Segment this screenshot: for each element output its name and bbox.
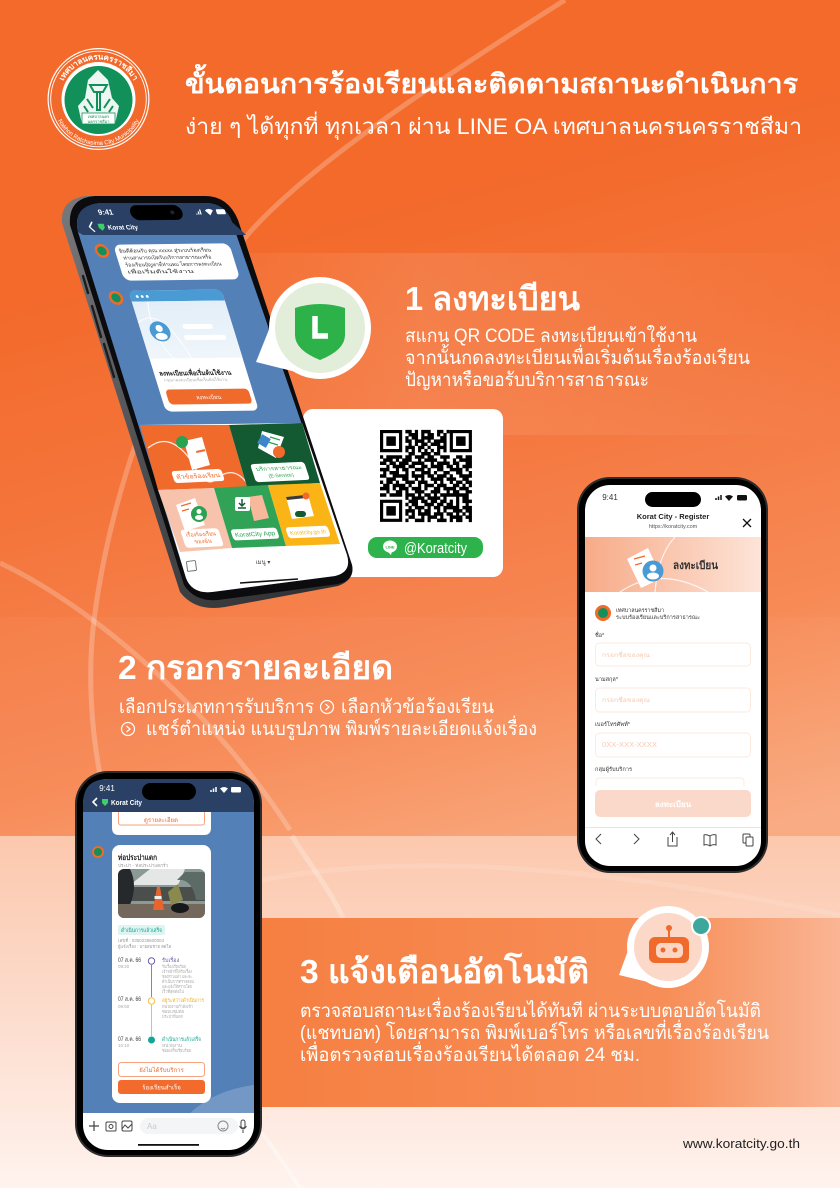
chat screen content: ท่านสามารถเปิดรับบริการสาธารณะหรือ — [122, 254, 212, 262]
menu tile: เรื่องร้องเรียนของฉัน: เรื่องร้องเรียน — [184, 529, 217, 539]
status timeline: 10:10 — [118, 1043, 130, 1048]
buttons — [118, 1062, 205, 1094]
form header — [585, 537, 761, 592]
photo: burst pipe — [118, 869, 205, 918]
status card: ดำเนินการแล้วเสร็จ — [121, 926, 162, 934]
status timeline: ของท่านแล้ว และจะ — [162, 974, 192, 979]
status card: ท่อประปาแตก — [118, 853, 157, 862]
chat screen content: ยินดีต้อนรับ คุณ xxxxx สู่ระบบร้องเรียน — [118, 247, 213, 255]
chat input bar — [89, 1118, 246, 1134]
menu tile: KoratCity App: KoratCity App — [234, 530, 277, 539]
website url: www.koratcity.go.th — [682, 1136, 800, 1151]
panel: QR code card — [303, 409, 503, 577]
step 2 heading: 2 กรอกรายละเอียด — [118, 649, 393, 686]
status timeline: และแจ้งให้ทราบโดย — [162, 983, 192, 989]
chat screen content: ร้องเรียนปัญหาที่ท่านพบ โดยการลงทะเบียน — [124, 261, 223, 269]
phone 2: registration form: Korat City - Register — [637, 512, 709, 521]
phone 3: LINE status screen: Aa — [147, 1122, 157, 1131]
chat screen content — [81, 204, 287, 412]
form body: กรอกชื่อของคุณ — [602, 651, 650, 659]
status timeline: หน่วยงาน — [162, 1043, 182, 1048]
menu tile: koratcity.go.th: Koratcity.go.th — [289, 529, 327, 537]
status timeline: หน่วยงานกำลังเข้า — [162, 1003, 193, 1009]
menu tile: e-Service — [229, 423, 320, 487]
form body: เทศบาลนครราชสีมา — [616, 607, 664, 614]
logo: Nakhon Ratchasima City Municipality seal: Nakhon Ratchasima City Municipality — [58, 118, 140, 145]
previous card — [112, 812, 211, 835]
step 1 heading: 1 ลงทะเบียน — [405, 280, 580, 317]
phone 1: LINE registration screen — [62, 196, 352, 608]
subtitle: ง่าย ๆ ได้ทุกที่ ทุกเวลา ผ่าน LINE OA เทศบาลนครนครราชสีมา — [185, 111, 802, 140]
status timeline — [118, 956, 204, 1053]
form body: ลงทะเบียน — [655, 799, 692, 809]
browser toolbar — [585, 828, 761, 846]
status timeline: เร็วที่สุดต่อไป — [162, 987, 184, 995]
status timeline: ประปาที่แตก — [162, 1013, 183, 1019]
logo: Nakhon Ratchasima City Municipality seal: เทศบาลนครนครราชสีมา — [59, 54, 137, 81]
status timeline: 09:20 — [118, 964, 130, 969]
LINE id pill: LINE — [385, 544, 395, 549]
form body: กรอกชื่อของคุณ — [602, 696, 650, 704]
icon: LINE shield callout — [256, 277, 371, 379]
menu tile: koratcity.go.th — [268, 483, 340, 546]
status timeline: เจ้าหน้าที่ได้รับเรื่อง — [162, 968, 192, 974]
status timeline: ซ่อมเสร็จเรียบร้อย — [162, 1046, 191, 1053]
status card: ผู้แจ้งเรื่อง : นายสมชาย สดใส — [118, 943, 171, 950]
buttons: ยังไม่ได้รับบริการ — [139, 1066, 185, 1074]
phone 2: registration form: https://koratcity.com — [649, 524, 698, 530]
step 3 text: (แชทบอท) โดยสามารถ พิมพ์เบอร์โทร หรือเลขที่เรื่องร้องเรียน — [300, 1019, 769, 1044]
logo: Nakhon Ratchasima City Municipality seal: นครราชสีมา — [88, 119, 110, 124]
step 1 text — [405, 325, 750, 391]
menu tile: e-Service: (E-Service) — [268, 473, 295, 480]
form body: ชื่อ* — [595, 631, 605, 639]
phone 2: registration form: 9:41 — [602, 493, 618, 502]
status card — [112, 845, 211, 1103]
phone 3: LINE status screen: 9:41 — [99, 784, 115, 793]
buttons: ร้องเรียนสำเร็จ — [142, 1082, 181, 1092]
phone 3: LINE status screen: Korat City — [111, 800, 142, 807]
step 1 text: ปัญหาหรือขอรับบริการสาธารณะ — [405, 370, 649, 391]
registration card — [128, 290, 259, 412]
QR code — [380, 430, 472, 522]
chat screen content: Korat City — [107, 224, 139, 232]
status timeline: ดำเนินการแล้วเสร็จ — [162, 1035, 201, 1043]
status timeline: รับเรื่อง — [162, 956, 180, 964]
step 3 heading: 3 แจ้งเตือนอัตโนมัติ — [300, 952, 589, 990]
step 2 text — [119, 696, 537, 740]
form body: กลุ่มผู้รับบริการ — [595, 766, 632, 773]
menu tile: ร้องเรียน — [140, 425, 250, 490]
chat screen content: เพื่อเริ่มต้นใช้งาน — [127, 268, 196, 276]
title: ขั้นตอนการร้องเรียนและติดตามสถานะดำเนินการ — [185, 63, 799, 99]
menu tile: e-Service: บริการสาธารณะ — [255, 464, 303, 473]
registration card: ลงทะเบียนเพื่อเริ่มต้นใช้งาน — [157, 367, 233, 378]
logo: Nakhon Ratchasima City Municipality seal — [48, 48, 150, 150]
step 1 text: จากนั้นกดลงทะเบียนเพื่อเริ่มต้นเรื่องร้องเรียน — [405, 344, 750, 369]
icon: chatbot callout — [619, 906, 711, 988]
status timeline: 07 ส.ค. 66 — [118, 996, 142, 1003]
menu tile: KoratCity App — [214, 485, 286, 548]
form body: เบอร์โทรศัพท์* — [595, 720, 631, 728]
previous card: ดูรายละเอียด — [144, 816, 178, 824]
form body: 0XX-XXX-XXXX — [602, 742, 657, 749]
status timeline: รับเรื่องเรียบร้อย — [162, 963, 186, 969]
menu bar — [186, 560, 298, 583]
registration card: กรุณาลงทะเบียนเพื่อเริ่มต้นใช้งาน — [163, 376, 228, 384]
status timeline: 09:50 — [118, 1004, 130, 1009]
LINE id pill — [368, 537, 483, 558]
logo: Nakhon Ratchasima City Municipality seal: เทศบาลนคร — [88, 114, 110, 119]
phone 2: registration form — [577, 477, 768, 873]
step 2 text: แชร์ตำแหน่ง แนบรูปภาพ พิมพ์รายละเอียดแจ้งเรื่อง — [146, 715, 537, 740]
status timeline: 07 ส.ค. 66 — [118, 957, 142, 964]
menu tile: เรื่องร้องเรียนของฉัน — [158, 488, 232, 552]
form body: ระบบร้องเรียนและบริการสาธารณะ — [616, 614, 700, 621]
step 2 text: เลือกหัวข้อร้องเรียน — [341, 696, 494, 718]
form body: นามสกุล* — [595, 676, 619, 683]
status card: ประปา - ท่อประปาแตกรั่ว — [118, 862, 168, 868]
form body — [595, 605, 751, 817]
status timeline: ซ่อมแซมท่อ — [162, 1009, 184, 1014]
menu tile: เรื่องร้องเรียนของฉัน: ของฉัน — [193, 538, 213, 545]
step 1 text: สแกน QR CODE ลงทะเบียนเข้าใช้งาน — [405, 325, 697, 347]
phone 3: LINE status screen — [75, 771, 262, 1157]
chat screen content: 9:41 — [97, 208, 115, 217]
step 3 text: เพื่อตรวจสอบเรื่องร้องเรียนได้ตลอด 24 ชม. — [300, 1041, 640, 1066]
step 3 text — [300, 997, 769, 1066]
form header: ลงทะเบียน — [673, 559, 718, 572]
step 2 text: เลือกประเภทการรับบริการ — [119, 697, 314, 718]
menu tile: ร้องเรียน: หัวข้อร้องเรียน — [175, 471, 222, 481]
step 3 text: ตรวจสอบสถานะเรื่องร้องเรียนได้ทันที ผ่านระบบตอบอัตโนมัติ — [300, 997, 761, 1022]
status timeline: ดำเนินการตรวจสอบ — [162, 978, 194, 984]
status card: เลขที่ : 0350235600003 — [118, 937, 164, 943]
registration card: ลงทะเบียน — [195, 394, 222, 401]
LINE id pill: @Koratcity — [404, 540, 467, 557]
menu bar: เมนู ▾ — [256, 560, 270, 566]
status timeline: อยู่ระหว่างดำเนินการ — [162, 997, 204, 1004]
status timeline: 07 ส.ค. 66 — [118, 1036, 142, 1043]
